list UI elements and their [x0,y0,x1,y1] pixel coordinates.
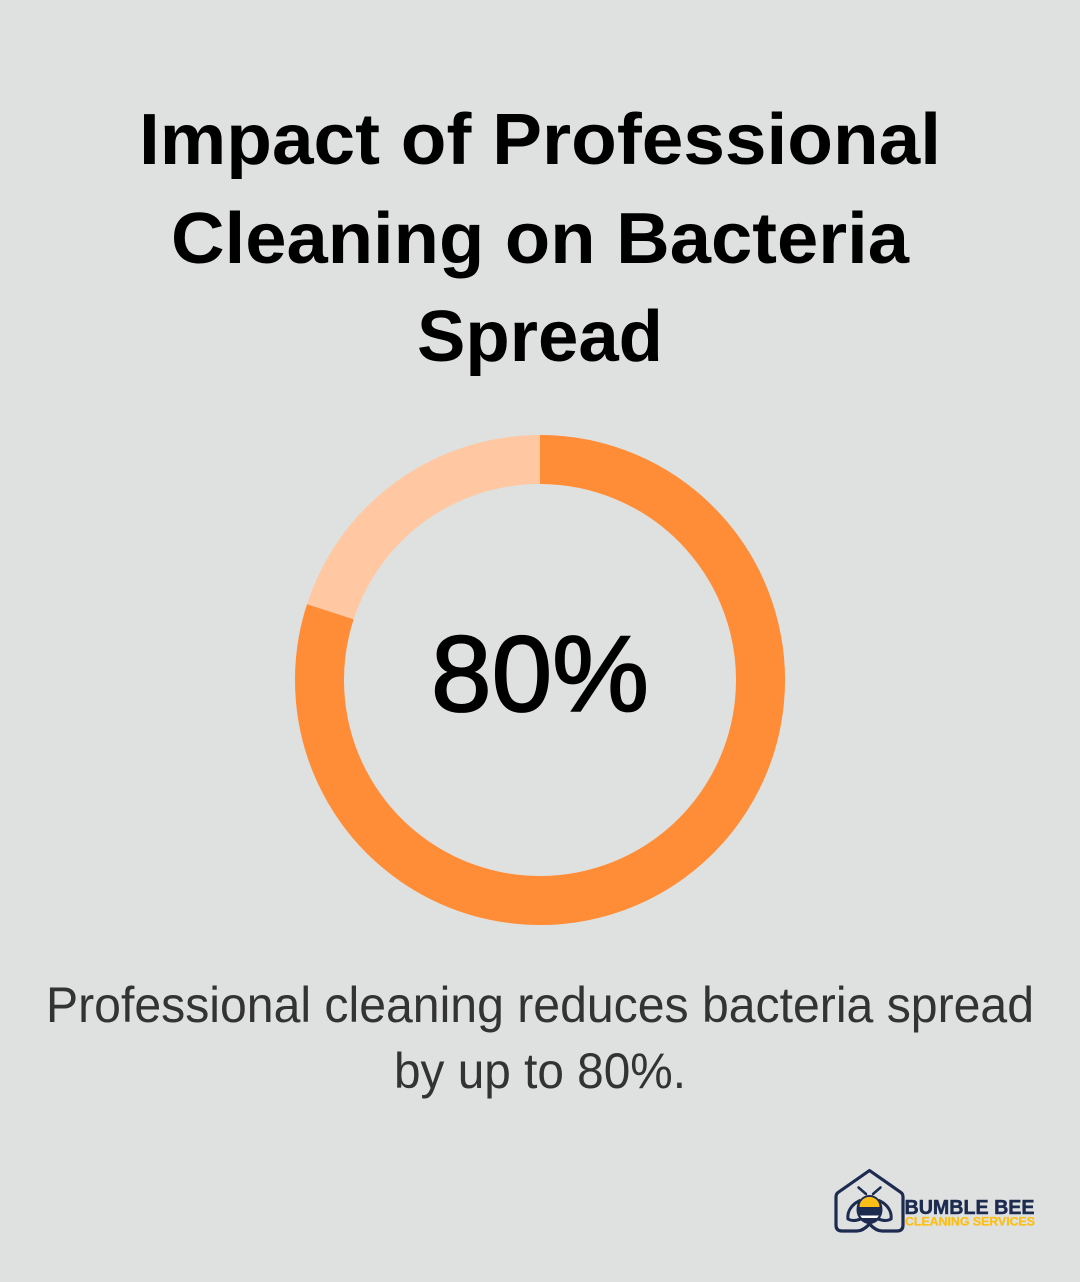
description text: Professional cleaning reduces bacteria spread [46,977,1034,1033]
title: Impact of Professional [139,100,941,180]
logo tagline: CLEANING SERVICES [905,1214,1035,1228]
description text [46,977,1034,1099]
logo wordmark: BUMBLE BEE [904,1197,1034,1219]
title: Spread [417,297,663,377]
icon: bee house [836,1170,903,1231]
logo [836,1170,1035,1231]
donut chart: 80% [320,459,761,900]
description text: by up to 80%. [394,1043,686,1099]
title: Cleaning on Bacteria [171,199,910,279]
donut value: 80% [431,613,649,734]
title [139,100,941,377]
